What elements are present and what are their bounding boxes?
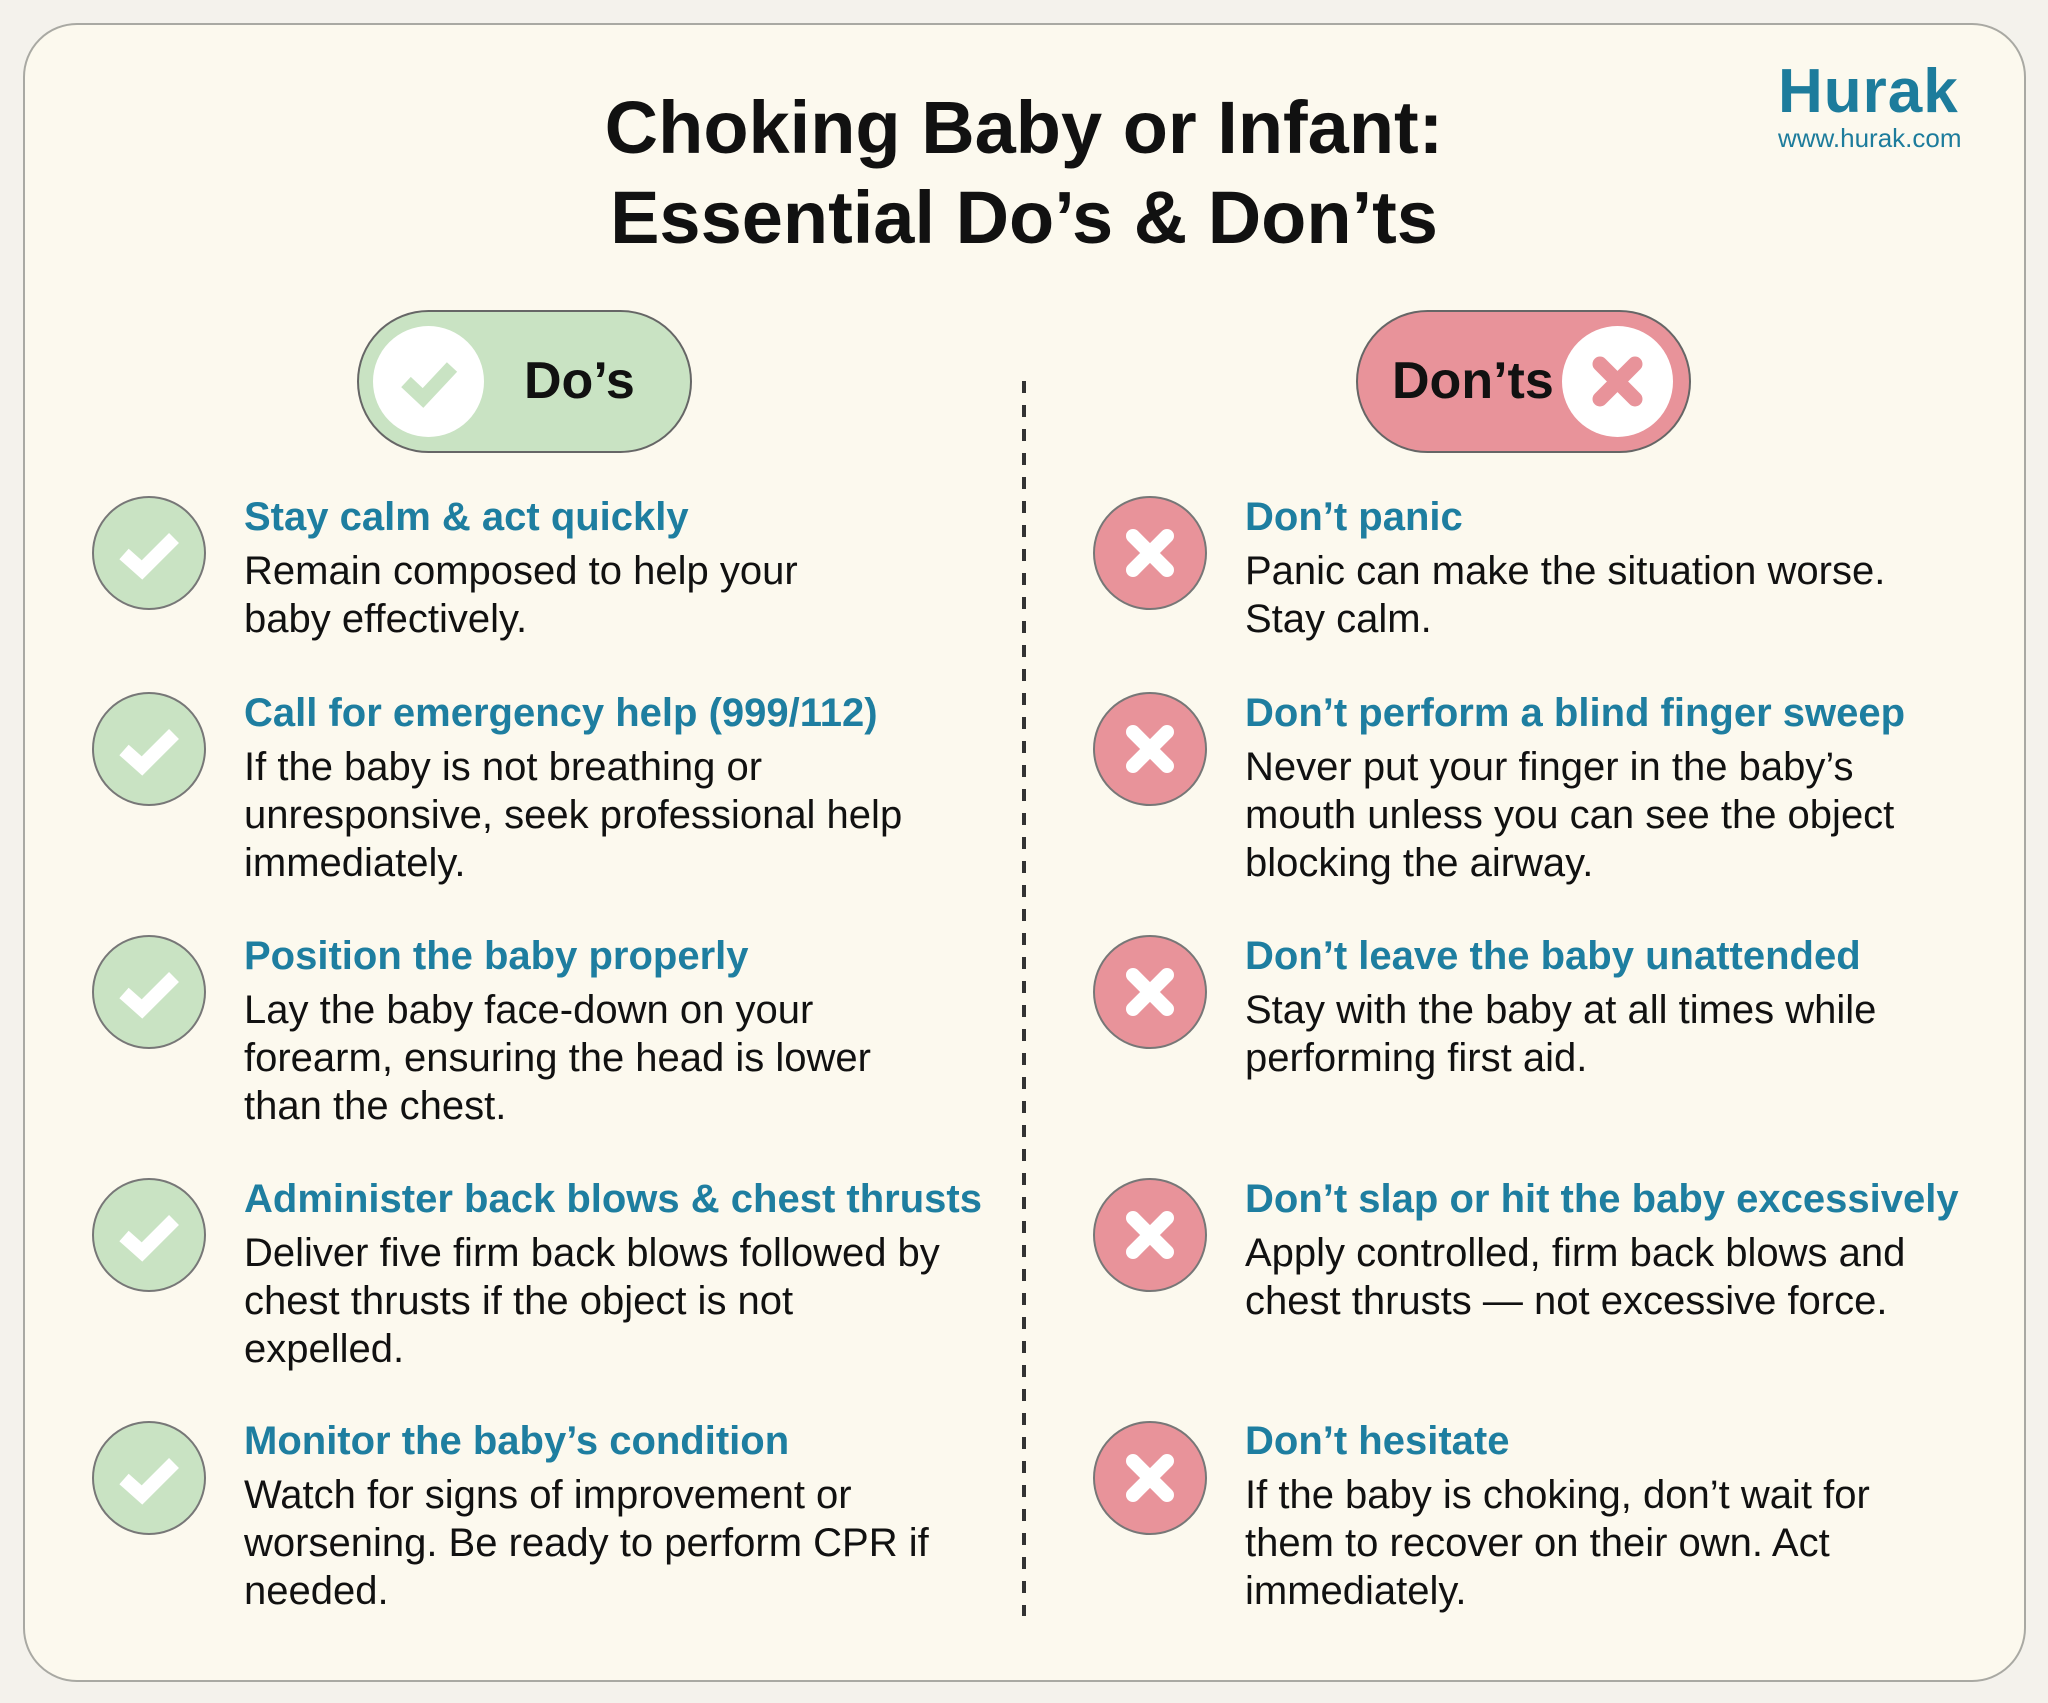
icon: check 2	[92, 692, 206, 806]
item: unattended	[1245, 934, 1876, 1080]
item: position: than the chest.	[244, 1084, 506, 1128]
item: unattended: Stay with the baby at all times while	[1245, 988, 1876, 1032]
item: administer: expelled.	[244, 1327, 404, 1371]
item: stay calm: Remain composed to help your	[244, 549, 798, 593]
item: slap: chest thrusts — not excessive force.	[1245, 1279, 1887, 1323]
item: hesitate: them to recover on their own. Act	[1245, 1521, 1830, 1565]
icon: x 5	[1093, 1421, 1207, 1535]
item: hesitate: immediately.	[1245, 1569, 1467, 1613]
title: Choking Baby or Infant:	[605, 86, 1443, 169]
item: finger sweep: Never put your finger in the baby’s	[1245, 745, 1854, 789]
item: don't panic: Don’t panic	[1245, 495, 1463, 539]
pill: don'ts	[1356, 310, 1691, 453]
icon: x 2	[1093, 692, 1207, 806]
title: Essential Do’s & Don’ts	[610, 176, 1438, 259]
logo: www.hurak.com	[1778, 123, 1962, 153]
item: unattended: performing first aid.	[1245, 1036, 1587, 1080]
item: monitor: needed.	[244, 1569, 389, 1613]
item: stay calm: Stay calm & act quickly	[244, 495, 689, 539]
item: slap: Apply controlled, firm back blows and	[1245, 1231, 1905, 1275]
item: hesitate: Don’t hesitate	[1245, 1419, 1509, 1463]
item: hesitate: If the baby is choking, don’t wait for	[1245, 1473, 1870, 1517]
item: unattended: Don’t leave the baby unattended	[1245, 934, 1861, 978]
item: call: Call for emergency help (999/112)	[244, 691, 878, 735]
item: finger sweep: Don’t perform a blind finger sweep	[1245, 691, 1905, 735]
item: position	[244, 934, 871, 1128]
item: monitor	[244, 1419, 929, 1613]
divider	[1022, 381, 1026, 1616]
item: hesitate	[1245, 1419, 1870, 1613]
pill: do's	[357, 310, 692, 453]
item: position: forearm, ensuring the head is lower	[244, 1036, 871, 1080]
item: monitor: Watch for signs of improvement or	[244, 1473, 852, 1517]
icon: check 4	[92, 1178, 206, 1292]
pill: don'ts: Don’ts	[1392, 352, 1554, 410]
item: don't panic	[1245, 495, 1885, 641]
item: call: unresponsive, seek professional help	[244, 793, 902, 837]
item: stay calm: baby effectively.	[244, 597, 527, 641]
icon: x 4	[1093, 1178, 1207, 1292]
icon: check 3	[92, 935, 206, 1049]
item: slap: Don’t slap or hit the baby excessively	[1245, 1177, 1959, 1221]
icon: x 3	[1093, 935, 1207, 1049]
item: administer: chest thrusts if the object is not	[244, 1279, 793, 1323]
item: position: Position the baby properly	[244, 934, 749, 978]
item: don't panic: Panic can make the situation worse.	[1245, 549, 1885, 593]
item: call: If the baby is not breathing or	[244, 745, 762, 789]
item: administer: Administer back blows & chest thrusts	[244, 1177, 982, 1221]
item: administer	[244, 1177, 982, 1371]
item: slap	[1245, 1177, 1959, 1323]
item: stay calm	[244, 495, 798, 641]
logo: Hurak	[1778, 57, 1959, 126]
item: administer: Deliver five firm back blows followed by	[244, 1231, 940, 1275]
icon: x 1	[1093, 496, 1207, 610]
title	[605, 86, 1443, 259]
item: call	[244, 691, 902, 885]
item: finger sweep: mouth unless you can see the object	[1245, 793, 1894, 837]
item: finger sweep: blocking the airway.	[1245, 841, 1593, 885]
icon: check 1	[92, 496, 206, 610]
pill: do's: Do’s	[524, 352, 635, 410]
item: monitor: Monitor the baby’s condition	[244, 1419, 789, 1463]
item: finger sweep	[1245, 691, 1905, 885]
item: call: immediately.	[244, 841, 466, 885]
item: monitor: worsening. Be ready to perform CPR if	[244, 1521, 929, 1565]
item: position: Lay the baby face-down on your	[244, 988, 813, 1032]
item: don't panic: Stay calm.	[1245, 597, 1432, 641]
icon: check 5	[92, 1421, 206, 1535]
